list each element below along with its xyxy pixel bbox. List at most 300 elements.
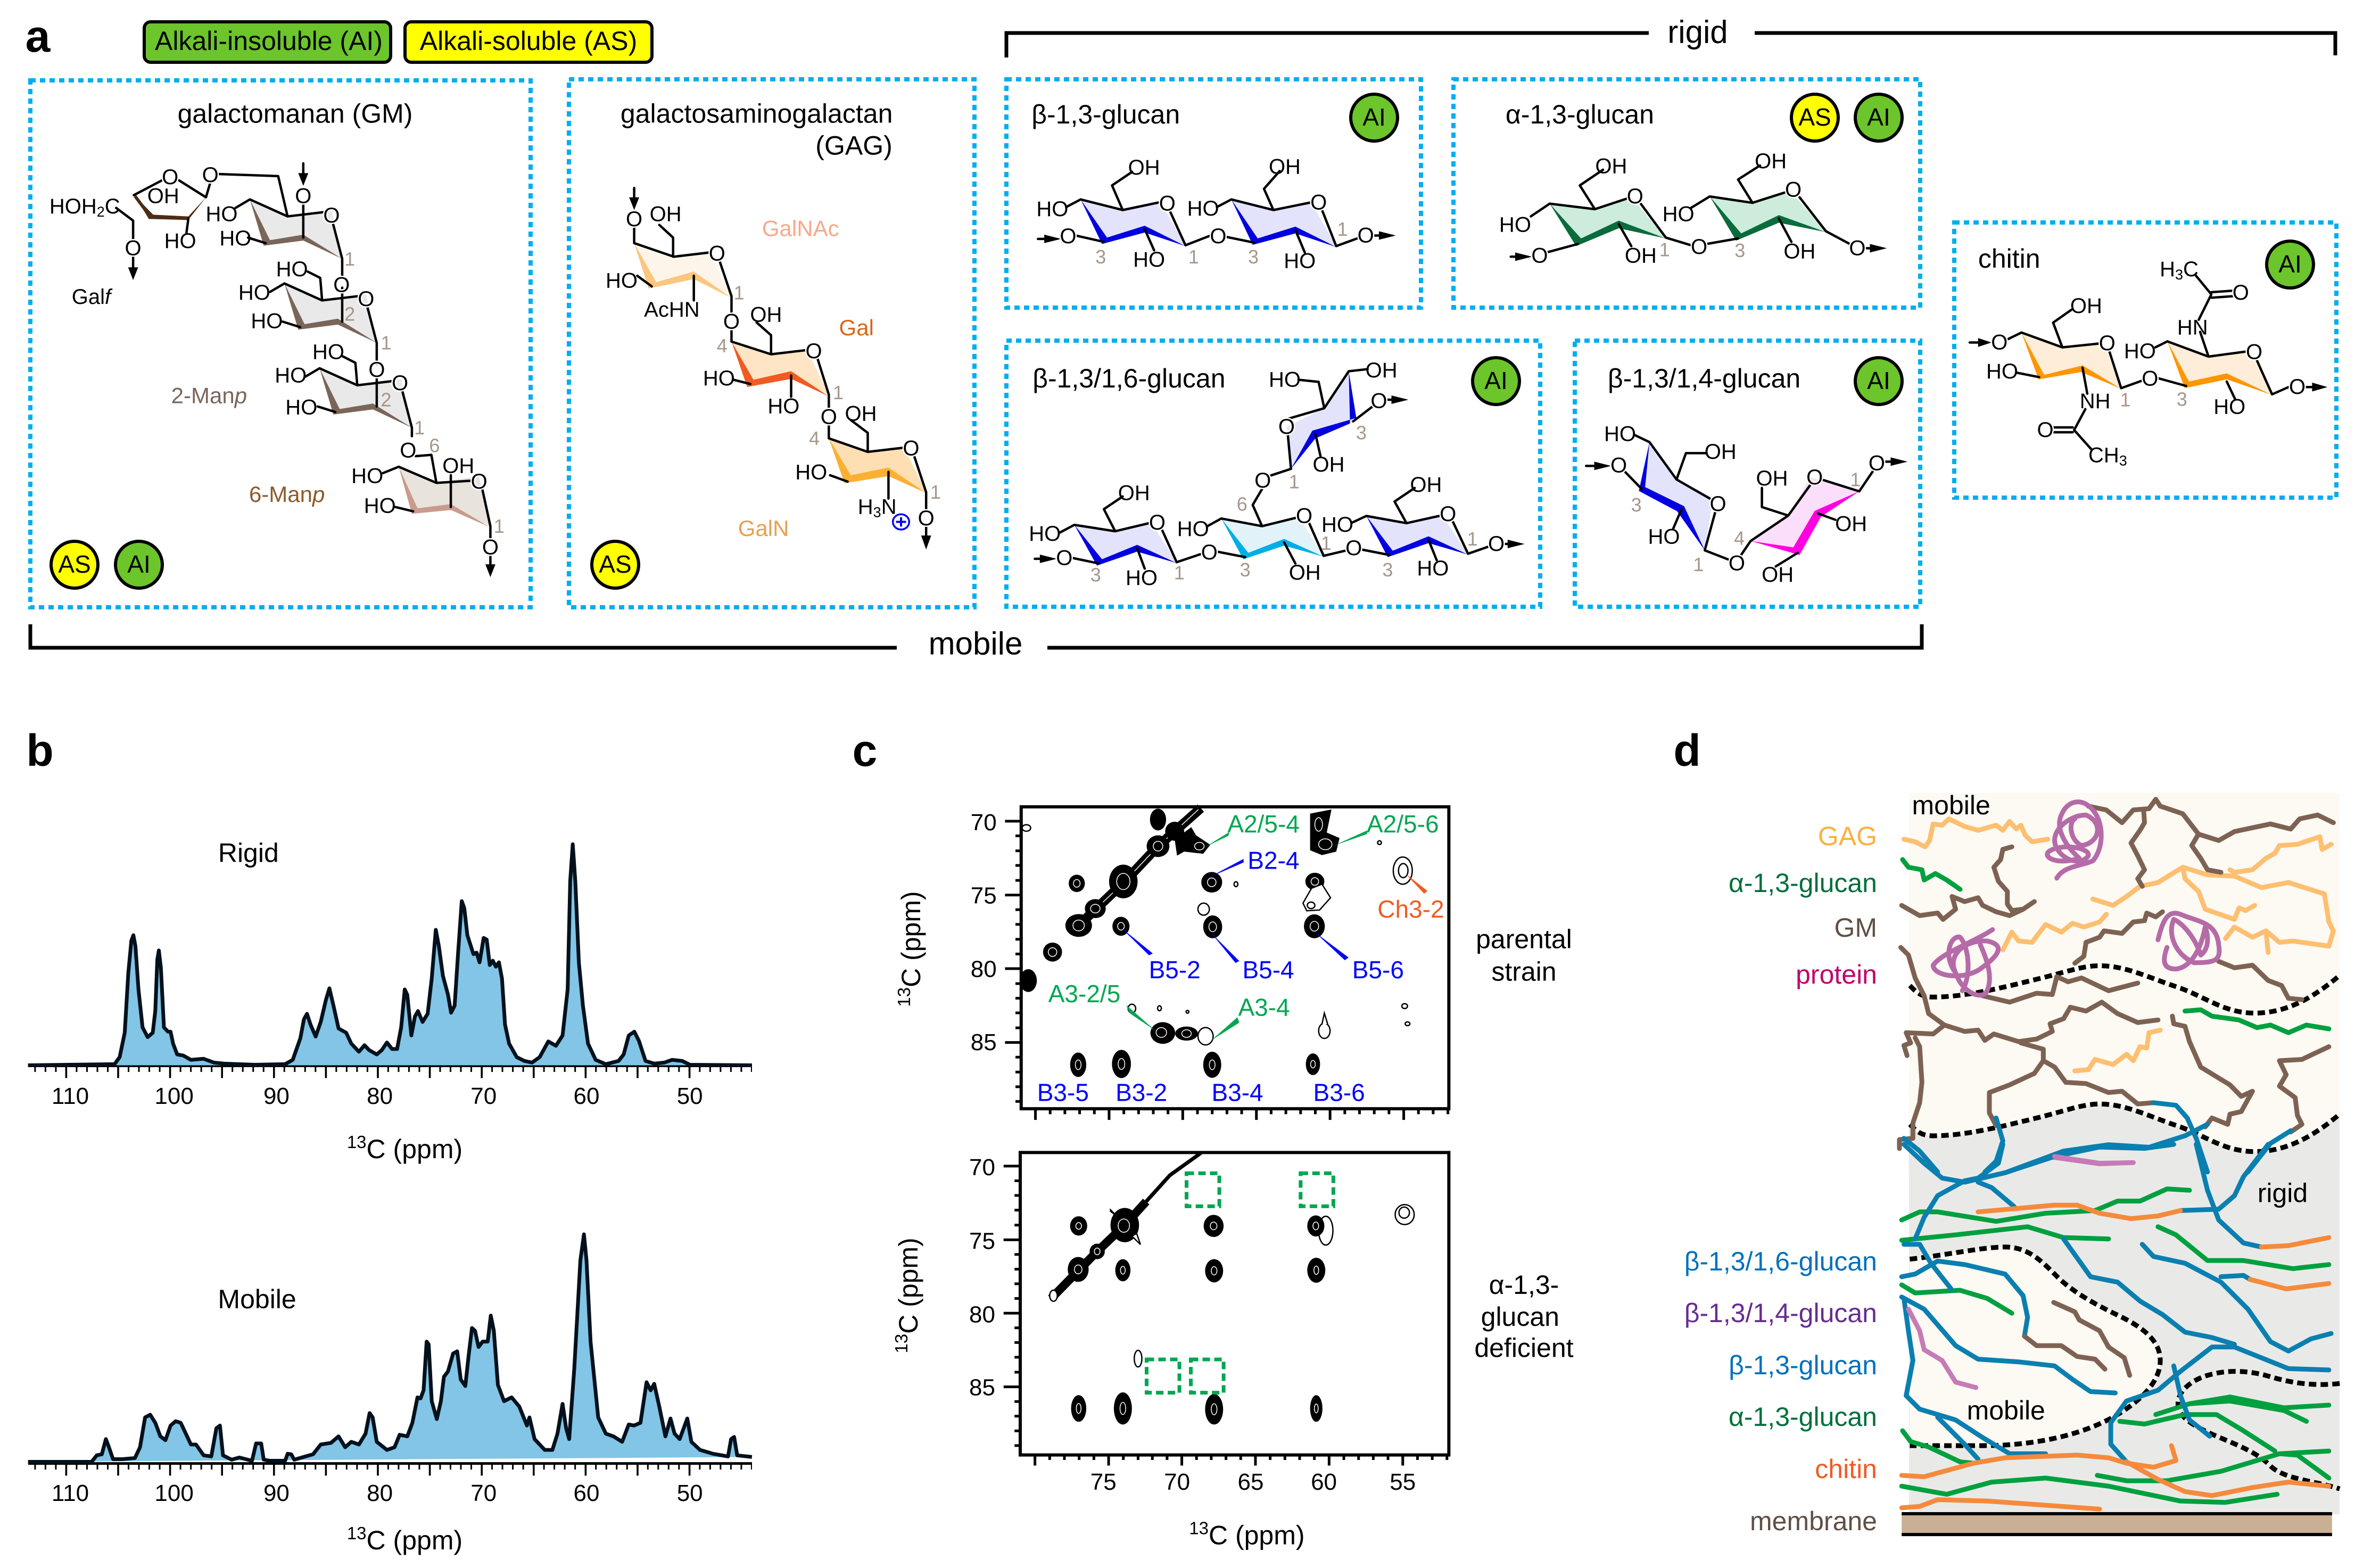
GalNAc ring: O: [709, 242, 725, 266]
structure: beta-1,3-glucan: HO: [1284, 249, 1316, 273]
x axis labels: 70: [1164, 1469, 1190, 1495]
Galf ring: HO: [164, 229, 196, 253]
structure: beta-1,3/1,6-glucan: O: [1370, 389, 1387, 412]
structure: alpha-1,3-glucan: α-1,3-glucan: [1506, 100, 1654, 129]
badge AI beta-1,3: [1351, 94, 1398, 141]
mannose rings: HO: [219, 227, 251, 250]
structure: beta-1,3/1,6-glucan: 1: [1289, 471, 1300, 492]
structure: beta-1,3-glucan: HO: [1133, 248, 1165, 271]
sample label parental strain: strain: [1491, 957, 1557, 987]
structure: alpha-1,3-glucan: O: [1531, 244, 1548, 268]
structure: alpha-1,3-glucan: 3: [1734, 240, 1745, 261]
sample label deficient: deficient: [1474, 1333, 1574, 1363]
Gal ring: 1: [833, 382, 844, 403]
structures left: GM and GAG: [49, 99, 941, 577]
badge AI beta-1,3/1,6: AI: [1484, 367, 1508, 394]
mannose rings: HO: [205, 203, 237, 226]
mobile axis labels: 70: [470, 1480, 497, 1506]
mannose rings: HO: [275, 364, 307, 387]
mannose rings: O: [333, 274, 350, 297]
structure: chitin: 3: [2175, 267, 2183, 283]
boundary dashed lines lower: [1910, 1247, 2340, 1489]
y axis labels: 85: [971, 1029, 997, 1055]
sample label parental strain: [1476, 924, 1572, 987]
y axis labels: 85: [969, 1375, 995, 1401]
structure: chitin: O: [2246, 341, 2262, 364]
structure: chitin: HO: [2124, 340, 2156, 363]
rigid background: [1909, 1168, 2340, 1514]
structure: beta-1,3/1,6-glucan: OH: [1118, 481, 1150, 505]
structure: beta-1,3-glucan: HO: [1187, 197, 1219, 220]
Galf ring: OH: [147, 184, 179, 208]
badge AI galactomanan: [115, 541, 162, 588]
frame and ticks: [1005, 807, 1449, 1120]
structure: beta-1,3-glucan: OH: [1128, 156, 1160, 179]
structure: galactomanan: galactomanan (GM): [178, 99, 412, 129]
badge AI chitin: [2267, 241, 2313, 288]
y axis title top: 13: [894, 987, 913, 1007]
x axis title: 13: [1189, 1518, 1209, 1538]
structure: beta-1,3-glucan: O: [1358, 224, 1374, 247]
structure: beta-1,3/1,6-glucan: OH: [1410, 473, 1442, 497]
top mobile label: mobile: [1912, 790, 1990, 820]
legend labels lower: [1684, 1247, 1877, 1536]
peak labels: A2/5-4: [1227, 810, 1300, 838]
GalN ring: 3: [873, 504, 881, 520]
structure: galactosaminogalactan: galactosaminogalactan: [621, 99, 893, 129]
legend: alkali-insoluble: [144, 22, 391, 62]
structure: beta-1,3/1,6-glucan: β-1,3/1,6-glucan: [1032, 364, 1226, 393]
structure: beta-1,3/1,6-glucan: 3: [1356, 422, 1367, 444]
sample label deficient: [1474, 1270, 1574, 1363]
mannose rings: O: [368, 358, 385, 382]
sample label deficient: glucan: [1481, 1302, 1559, 1332]
beta-glucan fibers: [1902, 1144, 2331, 1462]
mannose rings: HO: [351, 464, 383, 488]
structure: alpha-1,3-glucan: O: [1627, 185, 1643, 208]
y axis labels: 75: [971, 883, 997, 909]
structure: beta-1,3-glucan: β-1,3-glucan: [1031, 100, 1180, 129]
structure: beta-1,3/1,6-glucan: HO: [1269, 368, 1301, 391]
mannose rings: 2: [344, 303, 355, 325]
GalN ring: HO: [795, 460, 827, 484]
structure: chitin: OH: [2070, 294, 2102, 318]
structure: galactomanan: [49, 99, 505, 577]
legend labels upper: protein: [1796, 960, 1877, 989]
badge AS galactomanan: [51, 541, 98, 588]
Gal ring: O: [723, 310, 740, 333]
legend: alkali-soluble: [405, 22, 652, 62]
structure: beta-1,3/1,4-glucan: 1: [1693, 554, 1704, 575]
Gal ring: Gal: [839, 315, 874, 340]
structure: chitin: O: [2289, 375, 2306, 399]
structure: chitin: CH: [2088, 444, 2119, 467]
structure: alpha-1,3-glucan: HO: [1499, 213, 1531, 237]
structure: beta-1,3/1,6-glucan: 3: [1382, 559, 1393, 581]
bracket: rigid: [1006, 14, 2335, 57]
boundary dashed lines: [1910, 965, 2340, 1152]
Galf ring: C: [105, 195, 120, 218]
frame and ticks: [1004, 1152, 1449, 1465]
GalN ring: O: [821, 406, 837, 429]
mannose rings: O: [392, 372, 408, 395]
structure: beta-1,3/1,6-glucan: OH: [1366, 359, 1398, 382]
mobile axis labels: 100: [154, 1480, 194, 1506]
Galf ring: O: [202, 163, 219, 187]
peak labels: [1037, 810, 1444, 1107]
membrane: [1902, 1514, 2332, 1534]
structure: beta-1,3/1,6-glucan: O: [1296, 504, 1312, 527]
alpha-glucan fibers mobile layer: [1903, 860, 2329, 1033]
structure: chitin: HO: [2213, 395, 2245, 418]
mannose rings: 1: [381, 332, 392, 354]
structure: beta-1,3/1,6-glucan: O: [1201, 541, 1218, 564]
structure: beta-1,3-glucan: 3: [1095, 246, 1106, 268]
badge AI beta-1,3/1,6: [1473, 358, 1519, 405]
parental strain contour spectrum: [1020, 808, 1412, 1078]
panel: GAG box: [569, 79, 974, 607]
structure: beta-1,3/1,4-glucan: [1586, 364, 1907, 587]
peak labels: B3-2: [1115, 1079, 1167, 1107]
structure: beta-1,3/1,4-glucan: OH: [1756, 467, 1788, 490]
rigid axis labels: 80: [367, 1083, 393, 1109]
panel a: polysaccharide structures: [26, 11, 2336, 661]
mobile axis labels: 50: [677, 1480, 703, 1506]
structure: galactosaminogalactan: [606, 99, 941, 549]
y axis labels: 80: [969, 1301, 995, 1327]
structure: beta-1,3/1,4-glucan: O: [1709, 492, 1726, 516]
structure: chitin: 1: [2120, 389, 2131, 411]
structure: chitin: 3: [2177, 388, 2187, 410]
structure: beta-1,3/1,6-glucan: 6: [1237, 493, 1247, 515]
mannose rings: O: [358, 287, 374, 311]
mannose rings: 2-Manp: [171, 383, 247, 408]
structure: chitin: O: [2037, 418, 2054, 442]
structure: galactosaminogalactan: (GAG): [815, 130, 893, 160]
structure: beta-1,3/1,4-glucan: O: [1806, 466, 1823, 489]
GM fibers: [1899, 799, 2333, 1149]
missing alpha-glucan peak boxes: [1146, 1173, 1333, 1393]
x axis labels: 55: [1390, 1469, 1416, 1495]
beta-1,3/1,4-glucan and GM fibers in island: [1908, 1157, 2133, 1388]
mannose rings: O: [400, 439, 416, 463]
x axis labels: 60: [1311, 1469, 1337, 1495]
structure: beta-1,3/1,4-glucan: OH: [1705, 440, 1737, 464]
legend labels upper: GAG: [1818, 821, 1877, 851]
peak labels: A2/5-6: [1367, 810, 1439, 838]
mobile spectrum trace: [28, 1234, 752, 1462]
structure: beta-1,3/1,4-glucan: O: [1610, 454, 1627, 477]
structure: beta-1,3/1,6-glucan: 1: [1174, 562, 1185, 584]
rigid axis labels: 50: [677, 1083, 703, 1109]
rigid label: rigid: [2258, 1178, 2308, 1208]
structure: chitin: C: [2183, 258, 2199, 281]
mobile spectrum axis ticks: [28, 1464, 752, 1470]
rigid axis labels: 70: [470, 1083, 497, 1109]
badge AS alpha-1,3: [1791, 94, 1838, 141]
structure: beta-1,3-glucan: O: [1310, 191, 1327, 214]
peak labels: B3-6: [1313, 1079, 1365, 1107]
mobile axis labels: [52, 1480, 703, 1506]
structure: chitin: 3: [2119, 453, 2127, 469]
badge AI beta-1,3: AI: [1362, 103, 1386, 131]
mannose rings: 2: [381, 389, 392, 410]
mannose rings: O: [295, 184, 311, 208]
GalN ring: 4: [809, 427, 820, 449]
y axis labels: 80: [971, 956, 997, 982]
peak labels: B5-4: [1242, 956, 1294, 984]
structure: beta-1,3/1,6-glucan: O: [1254, 469, 1271, 492]
structure: beta-1,3-glucan: OH: [1269, 155, 1301, 178]
y axis labels: [969, 1154, 995, 1401]
Galf ring: [49, 163, 287, 309]
structure: beta-1,3/1,4-glucan: OH: [1835, 513, 1867, 536]
structure: beta-1,3-glucan: O: [1210, 225, 1226, 248]
GalNAc ring: OH: [650, 203, 682, 226]
Galf ring: 2: [97, 204, 105, 220]
structure: chitin: O: [1991, 331, 2007, 354]
rigid axis labels: [52, 1083, 703, 1109]
structure: beta-1,3/1,6-glucan: O: [1345, 537, 1362, 560]
GalN ring: H: [858, 495, 873, 518]
chitin fibers: [1902, 1205, 2329, 1509]
positive charge: [893, 514, 909, 530]
peak labels: B3-4: [1211, 1079, 1263, 1107]
legend labels lower: membrane: [1750, 1506, 1877, 1536]
badge AI alpha-1,3: [1855, 94, 1902, 141]
GalN ring: 1: [930, 481, 941, 503]
protein coils: [1933, 802, 2219, 995]
sample label deficient: α-1,3-: [1489, 1270, 1559, 1300]
badge AI beta-1,3/1,4: AI: [1867, 367, 1890, 394]
legend labels lower: β-1,3-glucan: [1729, 1350, 1877, 1380]
structure: chitin: [1970, 244, 2327, 469]
alpha-1,3-glucan fibers: [1902, 1189, 2329, 1503]
mannose rings: OH: [442, 454, 474, 477]
GalNAc ring: HO: [606, 269, 638, 293]
GalNAc ring: 1: [734, 282, 745, 304]
mannose rings: 6: [429, 435, 440, 457]
y axis labels: 75: [969, 1228, 995, 1254]
bracket: mobile: [30, 624, 1922, 661]
y axis title bottom: 13: [891, 1334, 911, 1354]
structure: alpha-1,3-glucan: O: [1849, 236, 1865, 260]
structure: beta-1,3/1,6-glucan: HO: [1177, 517, 1209, 541]
legend labels lower: α-1,3-glucan: [1729, 1402, 1877, 1432]
structure: beta-1,3/1,6-glucan: OH: [1289, 561, 1321, 584]
mannose rings: HO: [276, 258, 308, 281]
structure: beta-1,3-glucan: HO: [1036, 197, 1068, 221]
GalNAc ring: [606, 188, 839, 321]
structure: beta-1,3/1,6-glucan: HO: [1029, 522, 1061, 546]
structures: glucans: [1029, 100, 1907, 590]
peak labels: B5-6: [1352, 956, 1404, 984]
structure: beta-1,3/1,4-glucan: 1: [1850, 468, 1861, 490]
structure: chitin: O: [2233, 281, 2249, 304]
structure: beta-1,3/1,6-glucan: 3: [1240, 559, 1251, 581]
mannose rings: 6-Manp: [249, 482, 325, 507]
mobile axis title: C (ppm): [367, 1525, 462, 1555]
panel: beta-1,3/1,6-glucan box: [1006, 341, 1540, 607]
structure: beta-1,3/1,6-glucan: O: [1056, 546, 1072, 570]
structure: beta-1,3/1,6-glucan: O: [1440, 502, 1456, 526]
peak labels: A3-2/5: [1048, 980, 1120, 1008]
legend: alkali-insoluble: Alkali-insoluble (AI): [155, 26, 383, 56]
structure: beta-1,3/1,6-glucan: OH: [1313, 453, 1345, 476]
panel: alpha-1,3-glucan box: [1453, 79, 1920, 308]
structure: chitin: HN: [2177, 316, 2208, 339]
Gal ring: OH: [750, 303, 782, 327]
GalN ring: O: [918, 507, 935, 530]
GalN ring: N: [881, 495, 897, 518]
rigid spectrum axis ticks: [28, 1066, 752, 1072]
panel: beta-1,3/1,4-glucan box: [1575, 341, 1920, 607]
deficient strain contour spectrum: [1050, 1153, 1414, 1424]
rigid axis labels: 100: [154, 1083, 194, 1109]
Gal ring: O: [805, 340, 822, 363]
structure: beta-1,3/1,4-glucan: 4: [1734, 527, 1745, 549]
structure: chitin: H: [2160, 258, 2175, 281]
rigid axis title: 13: [347, 1132, 367, 1152]
mobile background: [1909, 793, 2340, 1166]
legend labels lower: β-1,3/1,4-glucan: [1684, 1298, 1877, 1328]
beta-glucan fibers crossing interface: [1904, 1103, 2291, 1172]
mannose rings: O: [471, 470, 487, 493]
structure: beta-1,3/1,6-glucan: 3: [1090, 564, 1101, 586]
mobile label lower: mobile: [1967, 1396, 2045, 1425]
structure: beta-1,3/1,6-glucan: O: [1149, 511, 1166, 534]
x axis labels: 75: [1090, 1469, 1117, 1495]
panel c: 2D spectra: [853, 725, 1574, 1550]
rigid axis labels: 110: [52, 1083, 89, 1109]
mannose rings: HO: [364, 494, 396, 517]
structure: beta-1,3/1,6-glucan: HO: [1126, 566, 1158, 590]
legend: alkali-soluble: Alkali-soluble (AS): [420, 26, 637, 56]
badge AS galactomanan: AS: [58, 550, 91, 578]
GalNAc ring: GalNAc: [762, 216, 839, 241]
structure: beta-1,3-glucan: 3: [1248, 246, 1259, 268]
panel: beta-1,3-glucan box: [1006, 79, 1421, 308]
structure: alpha-1,3-glucan: O: [1785, 178, 1802, 201]
mannose rings: O: [323, 204, 340, 227]
structure: beta-1,3/1,4-glucan: HO: [1648, 525, 1680, 548]
structure: beta-1,3-glucan: 1: [1188, 246, 1199, 268]
Galf ring: Galf: [72, 285, 113, 309]
panel: galactomanan box: [30, 80, 531, 607]
structure: beta-1,3/1,4-glucan: HO: [1604, 423, 1636, 446]
structure: chitin: chitin: [1978, 244, 2040, 274]
GalN ring: OH: [845, 402, 877, 425]
mobile axis labels: 110: [52, 1480, 89, 1506]
panel b: 1D 13C spectra: [26, 725, 752, 1555]
mannose rings: 1: [494, 515, 505, 537]
y axis labels: 70: [969, 1154, 995, 1181]
mannose rings: [171, 163, 505, 577]
legend labels upper: α-1,3-glucan: [1729, 868, 1877, 898]
legend labels upper: GM: [1834, 913, 1877, 943]
x axis labels: 65: [1238, 1469, 1264, 1495]
structure: alpha-1,3-glucan: 1: [1659, 238, 1670, 260]
bracket: rigid: rigid: [1667, 14, 1728, 50]
peak labels: A3-4: [1238, 993, 1290, 1021]
GalNAc ring: AcHN: [644, 298, 700, 321]
Galf ring: O: [162, 166, 178, 189]
structure: beta-1,3/1,6-glucan: 1: [1467, 528, 1478, 550]
rigid spectrum trace: [28, 844, 752, 1065]
badge AI alpha-1,3: AI: [1867, 103, 1890, 131]
Gal ring: HO: [767, 395, 799, 418]
structure: chitin: O: [2142, 367, 2158, 390]
x axis title: C (ppm): [1209, 1521, 1305, 1550]
peak labels: B2-4: [1247, 846, 1299, 874]
structure: alpha-1,3-glucan: OH: [1755, 150, 1787, 173]
mannose rings: HO: [251, 309, 283, 333]
Gal ring: HO: [703, 367, 735, 390]
structure: alpha-1,3-glucan: OH: [1625, 244, 1657, 268]
GAG fibers: [1904, 819, 2333, 1071]
structure: alpha-1,3-glucan: O: [1691, 235, 1707, 259]
GalN ring: O: [903, 437, 919, 460]
badge AI galactomanan: AI: [127, 550, 151, 578]
structure: alpha-1,3-glucan: HO: [1663, 203, 1695, 226]
y axis title bottom: C (ppm): [894, 1237, 923, 1334]
structure: beta-1,3/1,6-glucan: O: [1278, 415, 1295, 439]
Galf ring: HOH: [49, 195, 97, 218]
structure: beta-1,3/1,4-glucan: 3: [1631, 494, 1642, 516]
peak pointers: [1121, 830, 1427, 1041]
Galf ring: O: [125, 236, 142, 260]
structure: alpha-1,3-glucan: OH: [1595, 155, 1627, 178]
peak labels: Ch3-2: [1377, 895, 1444, 923]
GalNAc ring: O: [626, 208, 642, 231]
sample label parental strain: parental: [1476, 924, 1572, 954]
structure: chitin: HO: [1986, 360, 2018, 383]
structure: beta-1,3/1,6-glucan: O: [1488, 532, 1505, 556]
mobile axis labels: 80: [367, 1480, 393, 1506]
structure: beta-1,3/1,6-glucan: 1: [1321, 532, 1332, 554]
rigid axis labels: 90: [263, 1083, 290, 1109]
mannose rings: HO: [238, 281, 270, 304]
rigid label: Rigid: [218, 838, 279, 868]
mobile label: Mobile: [218, 1284, 296, 1314]
structure: alpha-1,3-glucan: [1499, 100, 1887, 268]
panel letter c: c: [853, 725, 877, 775]
Gal ring: [703, 303, 874, 418]
peak labels: B5-2: [1149, 956, 1201, 984]
GalN ring: GalN: [738, 516, 789, 541]
badge AI beta-1,3/1,4: [1855, 358, 1902, 405]
legend labels lower: β-1,3/1,6-glucan: [1684, 1247, 1877, 1276]
mobile island: [1910, 1247, 2160, 1446]
badge AS GAG: [592, 541, 639, 588]
badge AS alpha-1,3: AS: [1798, 103, 1831, 131]
structure: beta-1,3/1,6-glucan: HO: [1417, 557, 1449, 580]
rigid axis labels: 60: [574, 1083, 599, 1109]
structure: beta-1,3/1,6-glucan: HO: [1321, 513, 1353, 537]
mannose rings: HO: [312, 341, 344, 364]
legend labels upper: [1729, 821, 1877, 989]
structure: beta-1,3/1,4-glucan: O: [1869, 452, 1885, 475]
structure: alpha-1,3-glucan: OH: [1783, 240, 1815, 263]
structure: beta-1,3/1,4-glucan: β-1,3/1,4-glucan: [1608, 364, 1800, 393]
badge AS GAG: AS: [599, 550, 632, 578]
panel letter b: b: [26, 725, 54, 775]
rigid axis title: C (ppm): [367, 1134, 462, 1164]
legend labels lower: chitin: [1815, 1454, 1877, 1484]
structure: beta-1,3-glucan: O: [1060, 225, 1076, 248]
panel d: cell wall model: [1673, 725, 2340, 1536]
mannose rings: HO: [285, 395, 317, 419]
